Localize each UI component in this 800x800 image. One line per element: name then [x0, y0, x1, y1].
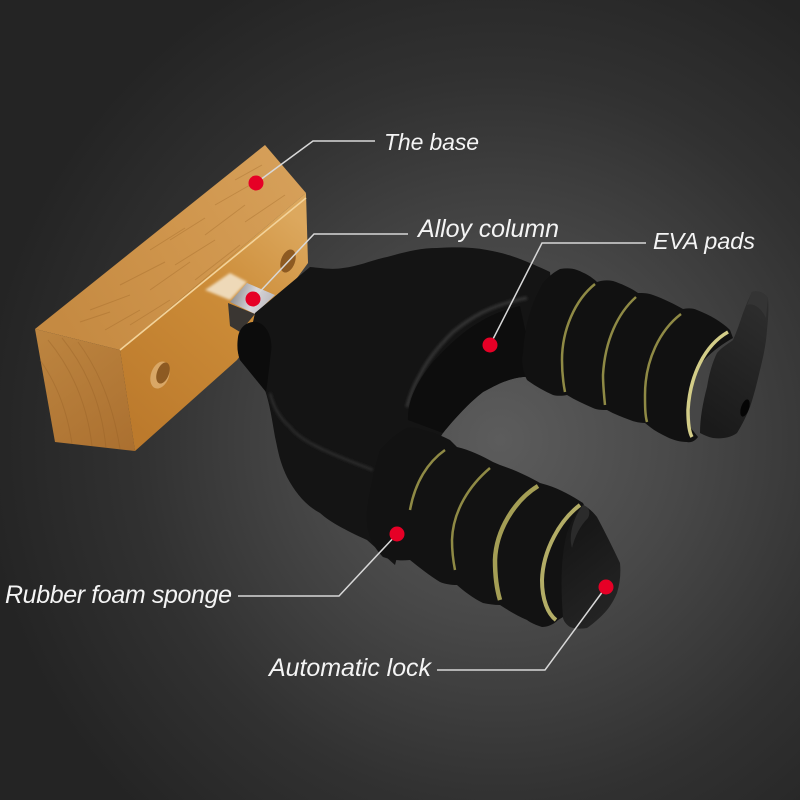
- upper ridge: [407, 298, 527, 407]
- wood end face: [35, 329, 135, 451]
- callout: EVA pads: [482, 228, 755, 352]
- lower automatic lock cap: [562, 505, 620, 629]
- callout: The base: [248, 129, 479, 190]
- wood edge highlight: [120, 198, 306, 350]
- upper rings: [562, 284, 681, 422]
- wooden base block: [35, 145, 308, 451]
- lower ridge: [270, 393, 373, 470]
- lower end ring: [542, 505, 580, 620]
- alloy column: [228, 283, 275, 332]
- upper arm foam sponge: [522, 268, 733, 442]
- upper automatic lock fin: [700, 291, 768, 438]
- wood side face: [120, 193, 308, 451]
- lower foam silhouette: [367, 428, 600, 627]
- wood top face: [35, 145, 306, 350]
- callout: EVA pads: EVA pads: [653, 228, 755, 254]
- callout: Alloy column: Alloy column: [416, 215, 559, 243]
- left shoulder: [237, 322, 271, 392]
- black hanger body: [237, 247, 560, 565]
- screw hole: right: [277, 247, 299, 275]
- callout: Automatic lock: Automatic lock: [267, 654, 432, 682]
- upper end ring: [688, 332, 728, 437]
- lower arm foam sponge: [367, 428, 600, 627]
- lower rings: [410, 450, 490, 570]
- screw hole: left: [147, 359, 173, 391]
- bright glare on wood: [205, 273, 247, 300]
- callout: Automatic lock: [267, 580, 614, 682]
- callout: Alloy column: [246, 215, 559, 306]
- callout: Rubber foam sponge: [5, 526, 404, 609]
- lock screw hole: [738, 398, 752, 418]
- callout: The base: The base: [384, 129, 479, 155]
- callout: Rubber foam sponge: Rubber foam sponge: [5, 581, 232, 609]
- EVA pad: [408, 306, 535, 433]
- upper foam silhouette: [522, 268, 733, 442]
